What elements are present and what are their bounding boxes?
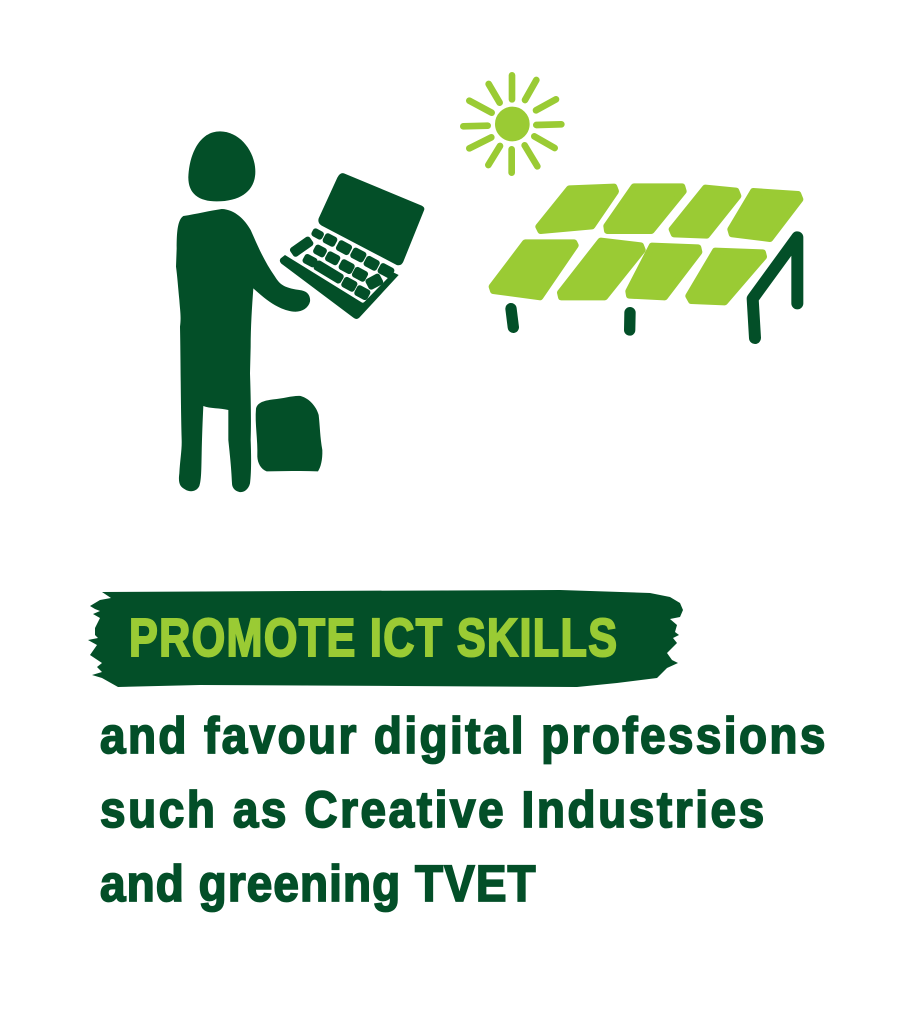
icon: laptop (280, 173, 424, 319)
icon: sun (463, 75, 561, 173)
line 2: such as Creative Industries (100, 782, 764, 839)
illustration: person with laptop and bag (176, 131, 424, 492)
icon: solar panels (492, 187, 800, 302)
laptop base edge (280, 255, 399, 319)
line 1: and favour digital professions (100, 708, 825, 765)
line 3: and greening TVET (100, 856, 536, 913)
illustration: sun and solar panels (463, 75, 800, 338)
icon: person head (188, 131, 255, 201)
text block: description (100, 708, 825, 913)
laptop keys (289, 227, 395, 301)
sun disc (496, 107, 529, 141)
banner heading: PROMOTE ICT SKILLS (129, 609, 617, 668)
brush stroke background (88, 590, 683, 687)
sun rays (463, 75, 561, 173)
laptop screen (318, 173, 424, 265)
banner: promote ICT skills (88, 590, 683, 687)
icon: bag (256, 396, 322, 471)
icon: solar panel stand (511, 237, 797, 338)
icon: person body (176, 209, 310, 492)
